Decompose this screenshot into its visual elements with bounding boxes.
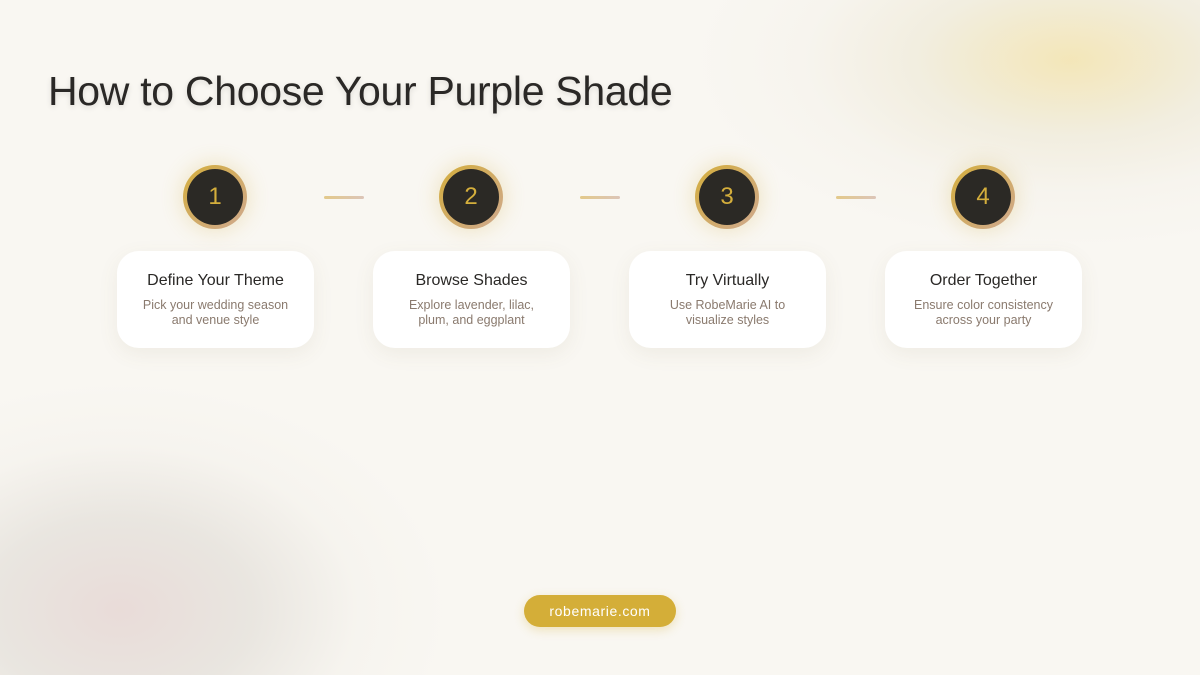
card: browse shades: Explore lavender, lilac,: [409, 298, 534, 312]
card: order together: [885, 251, 1082, 348]
card: try virtually: Use RobeMarie AI to: [670, 298, 785, 312]
card: try virtually: [629, 251, 826, 348]
card: order together: Order Together: [930, 272, 1037, 289]
card: define your theme: [117, 251, 314, 348]
step 3 circle: [695, 165, 759, 229]
card: define your theme: Define Your Theme: [147, 272, 284, 289]
card: order together: Ensure color consistency: [914, 298, 1053, 312]
step 2 circle: [439, 165, 503, 229]
card: try virtually: visualize styles: [686, 313, 769, 327]
step 3 circle: 3: [720, 183, 734, 210]
card: define your theme: Pick your wedding season: [143, 298, 288, 312]
connector 2-3: [580, 196, 620, 199]
card: try virtually: Try Virtually: [686, 272, 769, 289]
step 4 circle: 4: [976, 183, 990, 210]
step 2 circle: 2: [464, 183, 478, 210]
card: order together: across your party: [936, 313, 1031, 327]
footer button: [524, 595, 676, 627]
card: browse shades: Browse Shades: [415, 272, 528, 289]
step 4 circle: [951, 165, 1015, 229]
connector 1-2: [324, 196, 364, 199]
card: define your theme: and venue style: [172, 313, 259, 327]
connector 3-4: [836, 196, 876, 199]
card: browse shades: [373, 251, 570, 348]
step 1 circle: [183, 165, 247, 229]
footer button: robemarie.com: [549, 603, 651, 619]
card: browse shades: plum, and eggplant: [418, 313, 525, 327]
step 1 circle: 1: [208, 183, 222, 210]
title: How to Choose Your Purple Shade: [48, 68, 672, 114]
